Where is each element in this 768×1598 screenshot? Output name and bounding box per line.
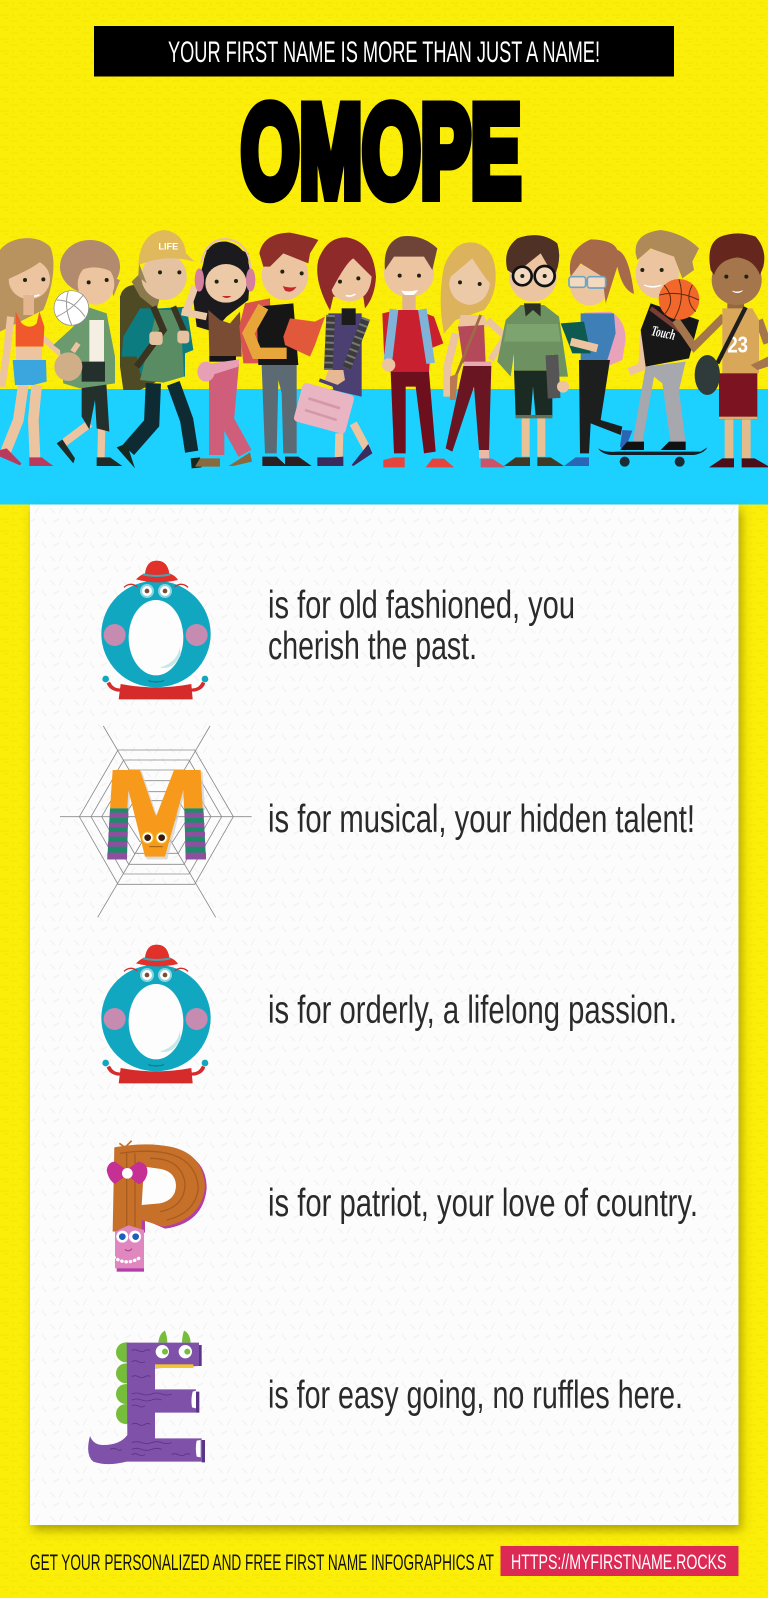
person 3: boy with cap and hiking backpack: LIFE <box>158 241 178 251</box>
person 2: girl in green jacket with volleyball <box>53 240 122 466</box>
spider web <box>60 726 252 917</box>
illustration: group of students, left half <box>0 230 376 468</box>
blue floor band <box>0 389 768 504</box>
row 1: letter O character <box>101 561 211 699</box>
row 1 text: is for old fashioned, you <box>268 584 575 627</box>
row 4: letter P character <box>107 1141 207 1272</box>
person 4: girl with headphones <box>182 239 255 467</box>
title: name: OMOPE <box>241 78 521 224</box>
row 5: letter E character <box>88 1331 205 1464</box>
row 1 text: cherish the past. <box>268 625 477 668</box>
illustration: group of students, right half <box>382 230 768 467</box>
person 1: girl in orange top <box>0 238 80 466</box>
basketball <box>659 279 699 320</box>
footer link button <box>500 1546 738 1576</box>
person 11: boy on skateboard with basketball <box>598 230 707 467</box>
person 10: girl with ponytail, glasses and tablet <box>561 239 634 466</box>
white content panel <box>30 504 738 1525</box>
person 12: boy in yellow tank top <box>676 233 768 467</box>
person 9: boy with black glasses and green sweater <box>497 235 569 466</box>
row 2: letter M character on spider web <box>60 726 252 917</box>
banner: tagline <box>94 26 674 76</box>
letter M body <box>107 770 206 859</box>
person 5: boy with red hair holding a book <box>239 233 325 466</box>
person 7: boy in red shirt with blue backpack straps <box>382 236 454 467</box>
person 12: boy in yellow tank top: 23 <box>727 332 748 358</box>
person 8: blonde girl with shoulder bag <box>441 242 506 467</box>
person 3: boy with cap and hiking backpack <box>117 230 202 468</box>
person 6: girl with pink bag and striped sleeves <box>293 237 376 466</box>
row 3: letter O character <box>101 945 211 1083</box>
row 1 text <box>268 584 575 668</box>
person 11: boy on skateboard with basketball: Touch <box>650 323 677 344</box>
footer call to action: GET YOUR PERSONALIZED AND FREE FIRST NAME INFOGRAPHICS AT <box>30 1550 494 1575</box>
